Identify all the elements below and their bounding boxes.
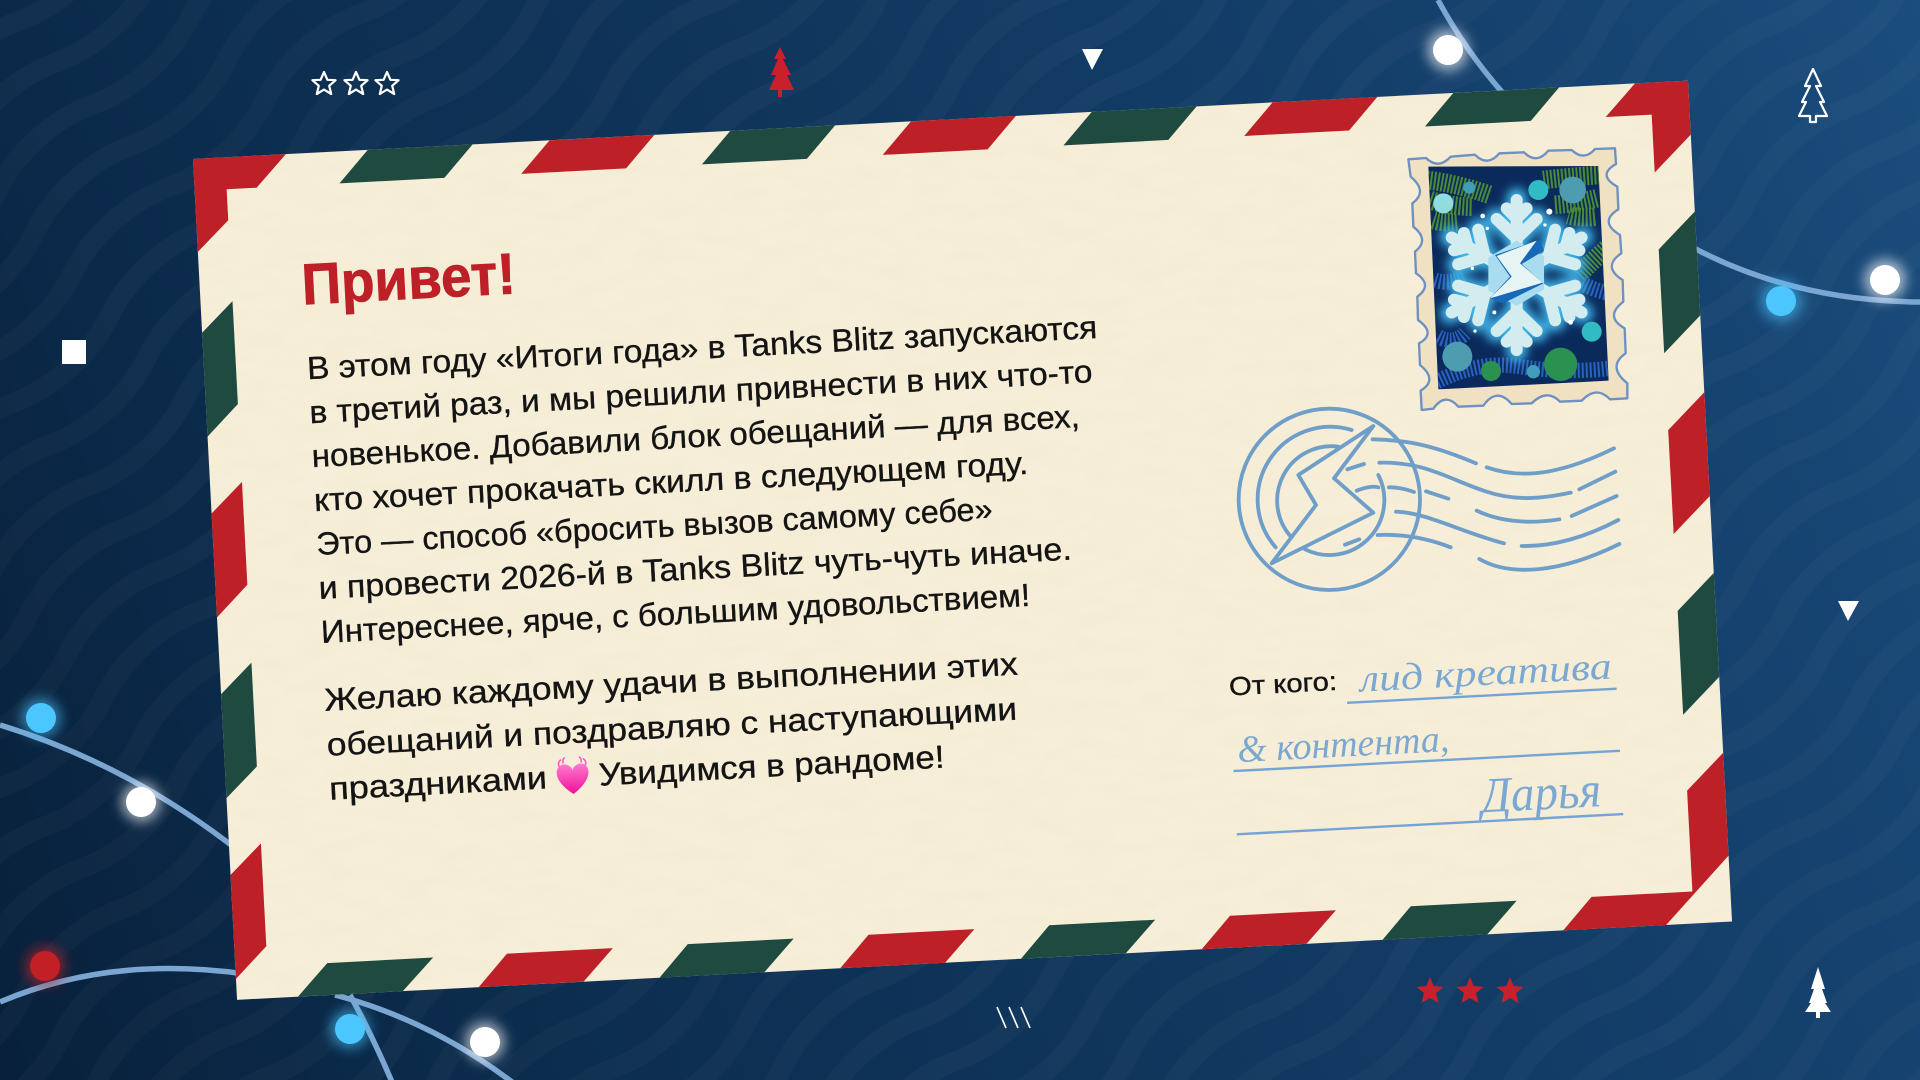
letter body paragraph 1: В этом году «Итоги года» в Tanks Blitz запускаются: [306, 309, 1098, 386]
letter body paragraph 1: [306, 309, 1112, 650]
paper texture: [193, 81, 1732, 1000]
postmark cancellation waves: [1345, 439, 1619, 570]
letter body paragraph 2: праздниками: [328, 759, 548, 807]
letter body paragraph 1: новенькое. Добавили блок обещаний — для всех,: [311, 398, 1081, 474]
blue fir branches: [1435, 277, 1610, 382]
icon: red tree: [769, 47, 794, 97]
stamp picture: [1423, 162, 1613, 395]
postage stamp: [1408, 148, 1627, 410]
icon: three slashes: [997, 1007, 1030, 1028]
icon: three red stars: [1416, 977, 1524, 1003]
from label: От кого:: [1228, 666, 1338, 701]
letter body paragraph 2: Увидимся в рандоме!: [598, 739, 945, 793]
airmail border red stripes: [193, 81, 1732, 1000]
postmark stamp: [1239, 409, 1619, 590]
letter body paragraph 1: кто хочет прокачать скилл в следующем году.: [313, 445, 1029, 518]
airmail border green stripes: [193, 81, 1732, 1000]
letter body paragraph 2: обещаний и поздравляю с наступающими: [326, 691, 1018, 763]
handwritten sender name: Дарья: [1476, 761, 1602, 824]
stamp perforated frame: [1408, 148, 1627, 410]
letter body paragraph 2: Желаю каждому удачи в выполнении этих: [324, 646, 1018, 718]
postmark lightning bolt: [1272, 426, 1373, 563]
paper: [193, 81, 1732, 1000]
snowflake: [1442, 200, 1592, 350]
icon: three outlined stars: [312, 72, 399, 94]
handwritten sender name: лид креатива: [1356, 645, 1613, 701]
icon: pink heart emoji: [556, 756, 590, 795]
title: Привет!: [300, 241, 517, 317]
baubles: [1433, 177, 1602, 381]
handwritten sender name: [1233, 645, 1619, 836]
icon: white triangle top: [1082, 49, 1103, 70]
paper sheet with stripes and letter text: [193, 81, 1732, 1000]
letter body paragraph 1: и провести 2026-й в Tanks Blitz чуть-чуть иначе.: [318, 531, 1073, 606]
stamp lightning emblem: [1488, 240, 1544, 306]
address lines: [1230, 689, 1623, 834]
letter body paragraph 2: [324, 646, 1023, 807]
icon: white square: [62, 340, 86, 364]
letter body paragraph 1: Интереснее, ярче, с большим удовольствием!: [320, 577, 1031, 650]
handwritten sender name: & контента,: [1236, 718, 1450, 771]
letter body paragraph 1: в третий раз, и мы решили привнести в них что-то: [308, 353, 1093, 430]
postmark rings: [1239, 409, 1420, 590]
snowflake glow: [1440, 198, 1593, 352]
icon: outlined tree: [1799, 69, 1827, 122]
green fir branches: [1427, 175, 1607, 275]
icon: white tree: [1805, 967, 1831, 1018]
letter body paragraph 1: Это — способ «бросить вызов самому себе»: [315, 491, 993, 562]
snow dots: [1471, 209, 1573, 333]
icon: white triangle right: [1838, 601, 1859, 621]
panel: envelope: [193, 81, 1732, 1000]
